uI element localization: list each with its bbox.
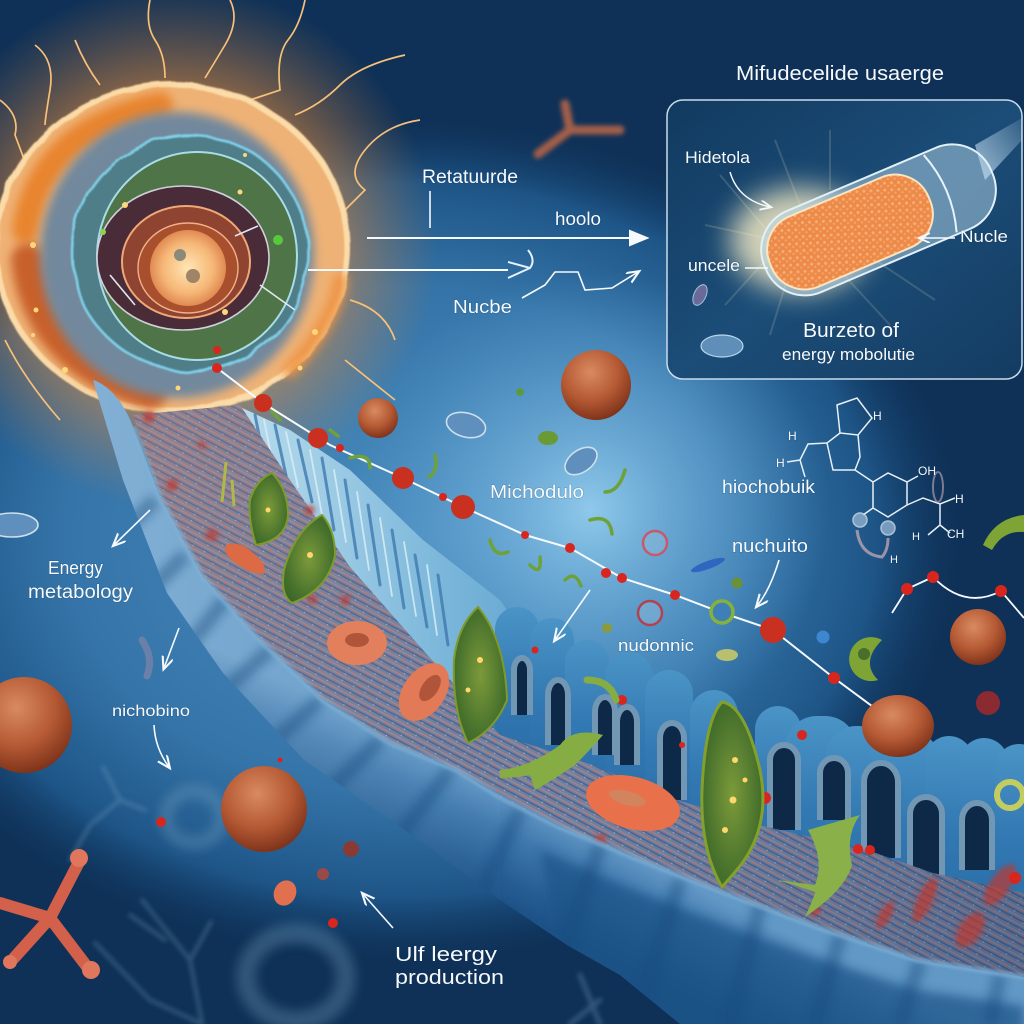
label: energy metabology: Energy: [48, 558, 103, 578]
label: michodulo: Michodulo: [490, 482, 584, 502]
label: uncele: [688, 256, 768, 275]
label: energy metabology: [28, 510, 150, 603]
label: nichobino: [112, 628, 190, 767]
sparkles: [30, 153, 318, 390]
capsule glow: [730, 188, 870, 292]
chemical structure: H: [890, 554, 898, 566]
caption: burst of energy molecule: energy mobolutie: [782, 345, 915, 364]
chemical structure: H: [776, 456, 785, 470]
warm glow: [0, 0, 437, 507]
front wall crest: [133, 427, 1024, 977]
caption: burst of energy molecule: Burzeto of: [803, 320, 899, 342]
rays: [705, 130, 935, 335]
icon: orange molecule bottom left: [0, 849, 100, 979]
green organelles: [222, 462, 1024, 917]
chemical structure: OH: [918, 464, 936, 478]
chemical structure: [776, 398, 964, 566]
arrows: cell to panel: [308, 191, 647, 298]
label: hiochobuik: hiochobuik: [722, 477, 816, 497]
green twisted shapes: [500, 733, 603, 790]
chemical structure: CH: [947, 527, 964, 541]
label: uncele: uncele: [688, 256, 740, 275]
caption: burst of energy molecule: [782, 320, 915, 364]
rib strokes: [130, 500, 1000, 1024]
brown spheres: [0, 350, 1006, 909]
label: nucle: [920, 227, 1008, 246]
lower wall shadow: [540, 850, 1024, 1024]
cristae arches: [514, 658, 992, 876]
label: nuchuito: [732, 536, 808, 606]
organelle sparkles: [266, 508, 748, 833]
right bead chain: [892, 571, 1024, 618]
chemical structure: H: [912, 531, 920, 543]
green squiggles: [272, 412, 625, 586]
label: hoolo: hoolo: [555, 209, 601, 229]
red clusters on floor: [143, 411, 1022, 953]
red bead chain with sub-organelles: [156, 346, 1021, 928]
red blood cells: [225, 544, 686, 841]
dark inner chamber: [97, 186, 269, 330]
blue-grey membrane: [40, 112, 314, 398]
label: ulf energy production: production: [395, 967, 504, 989]
label: ulf energy production: [363, 894, 504, 989]
floor tint: [133, 405, 1024, 977]
label: energy metabology: metabology: [28, 582, 134, 603]
label: ulf energy production: Ulf leergy: [395, 944, 497, 966]
blue ovals: [0, 408, 602, 537]
electric filaments: [0, 0, 420, 420]
teal ring: [72, 135, 308, 371]
inner rings: [122, 206, 250, 318]
front wall shading and ribs: [130, 500, 1024, 1024]
orange bands: [25, 105, 340, 392]
red blobs: [254, 394, 786, 643]
title: Mifudecelide usaerge: [736, 63, 944, 85]
icon: faint molecule top: [538, 104, 620, 154]
label: nudonnic: [555, 590, 695, 655]
panel: mitochondrial usage capsule: [667, 100, 1022, 379]
back folds left: [255, 415, 448, 645]
label: retatuurde: Retatuurde: [422, 167, 518, 188]
decorative faint neurons: [70, 767, 600, 1024]
label: hidetola: [685, 148, 770, 207]
mitochondrion tube: [93, 380, 1024, 1024]
striped floor: [133, 405, 1024, 977]
tube back wall: [240, 407, 540, 730]
green ring: [97, 152, 297, 360]
cell: energy burst: [0, 0, 437, 507]
small blue cell icon: [701, 335, 743, 357]
label: hidetola: Hidetola: [685, 148, 751, 167]
blue lobes: [495, 607, 1024, 934]
label: nuchuito: nuchuito: [732, 536, 808, 556]
label: nucbe: Nucbe: [453, 297, 512, 317]
chemical structure: H: [873, 409, 882, 423]
capsule: [748, 131, 1009, 308]
outer orange shell: [0, 85, 348, 411]
chemical structure: H: [788, 429, 797, 443]
light beam: [975, 118, 1022, 180]
label: nudonnic: nudonnic: [618, 636, 695, 655]
chemical structure: H: [955, 492, 964, 506]
label: nucle: Nucle: [960, 227, 1008, 246]
front wall left highlight: [93, 380, 500, 900]
label: nichobino: nichobino: [112, 703, 190, 720]
tube front wall: [93, 380, 1024, 1024]
small pill icon: [690, 282, 710, 308]
glowing core: [150, 230, 226, 306]
